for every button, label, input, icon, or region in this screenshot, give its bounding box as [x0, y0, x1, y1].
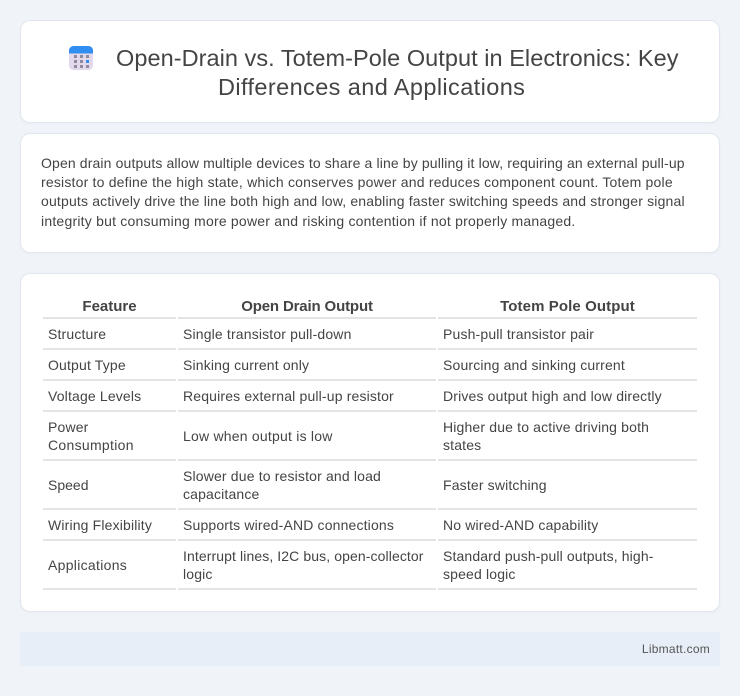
icon: calendar — [69, 46, 93, 70]
row: power consumption: Higher due to active driving both — [443, 419, 649, 435]
intro text: outputs actively drive the line both high and low, enabling faster switching speeds and stronger signal — [41, 193, 685, 209]
row: speed: Slower due to resistor and load — [183, 468, 381, 484]
row: voltage levels: Drives output high and low directly — [443, 388, 662, 404]
row: wiring flexibility: Supports wired-AND connections — [183, 517, 394, 533]
row: speed — [48, 468, 547, 502]
panel: intro — [20, 133, 720, 253]
row: applications: Interrupt lines, I2C bus, open-collector — [183, 548, 424, 564]
row: voltage levels: Voltage Levels — [48, 388, 141, 404]
row: output type: Output Type — [48, 357, 126, 373]
row: structure: Push-pull transistor pair — [443, 326, 594, 342]
row: power consumption: Power — [48, 419, 88, 435]
row: wiring flexibility: Wiring Flexibility — [48, 517, 152, 533]
row: power consumption: Low when output is low — [183, 428, 333, 444]
row: output type: Sourcing and sinking current — [443, 357, 625, 373]
row: applications: Standard push-pull outputs, high- — [443, 548, 654, 564]
row: structure: Structure — [48, 326, 106, 342]
row: speed: Speed — [48, 477, 88, 493]
panel: comparison table — [20, 273, 720, 612]
intro text: resistor to define the high state, which conserves power and reduces component count. Totem pole — [41, 174, 673, 190]
table header — [82, 298, 635, 315]
row: output type: Sinking current only — [183, 357, 309, 373]
intro text: integrity but consuming more power and risking contention if not properly managed. — [41, 213, 576, 229]
title line 2: Differences and Applications — [218, 74, 525, 100]
row: power consumption: Consumption — [48, 437, 134, 453]
table header: Open Drain Output — [241, 298, 373, 315]
panel: title card — [20, 20, 720, 123]
row: applications: Applications — [48, 557, 127, 573]
row: applications: logic — [183, 566, 213, 582]
row: power consumption: states — [443, 437, 481, 453]
row: voltage levels: Requires external pull-up resistor — [183, 388, 394, 404]
row: wiring flexibility: No wired-AND capability — [443, 517, 598, 533]
row: speed: capacitance — [183, 486, 259, 502]
footer bar — [20, 632, 720, 666]
intro text: Open drain outputs allow multiple devices to share a line by pulling it low, requiring an external pull-up — [41, 155, 685, 171]
row: speed: Faster switching — [443, 477, 547, 493]
table header: Totem Pole Output — [500, 298, 635, 315]
table header: Feature — [82, 298, 137, 315]
title: Open-Drain vs. Totem-Pole Output in Electronics: Key — [116, 45, 678, 71]
row: voltage levels — [48, 388, 662, 404]
row: structure — [48, 326, 594, 342]
footer text: Libmatt.com — [642, 642, 710, 656]
row: applications — [48, 548, 654, 582]
row: wiring flexibility — [48, 517, 598, 533]
row: applications: speed logic — [443, 566, 516, 582]
row: power consumption — [48, 419, 649, 453]
row: output type — [48, 357, 625, 373]
intro text — [41, 155, 685, 229]
row: structure: Single transistor pull-down — [183, 326, 352, 342]
